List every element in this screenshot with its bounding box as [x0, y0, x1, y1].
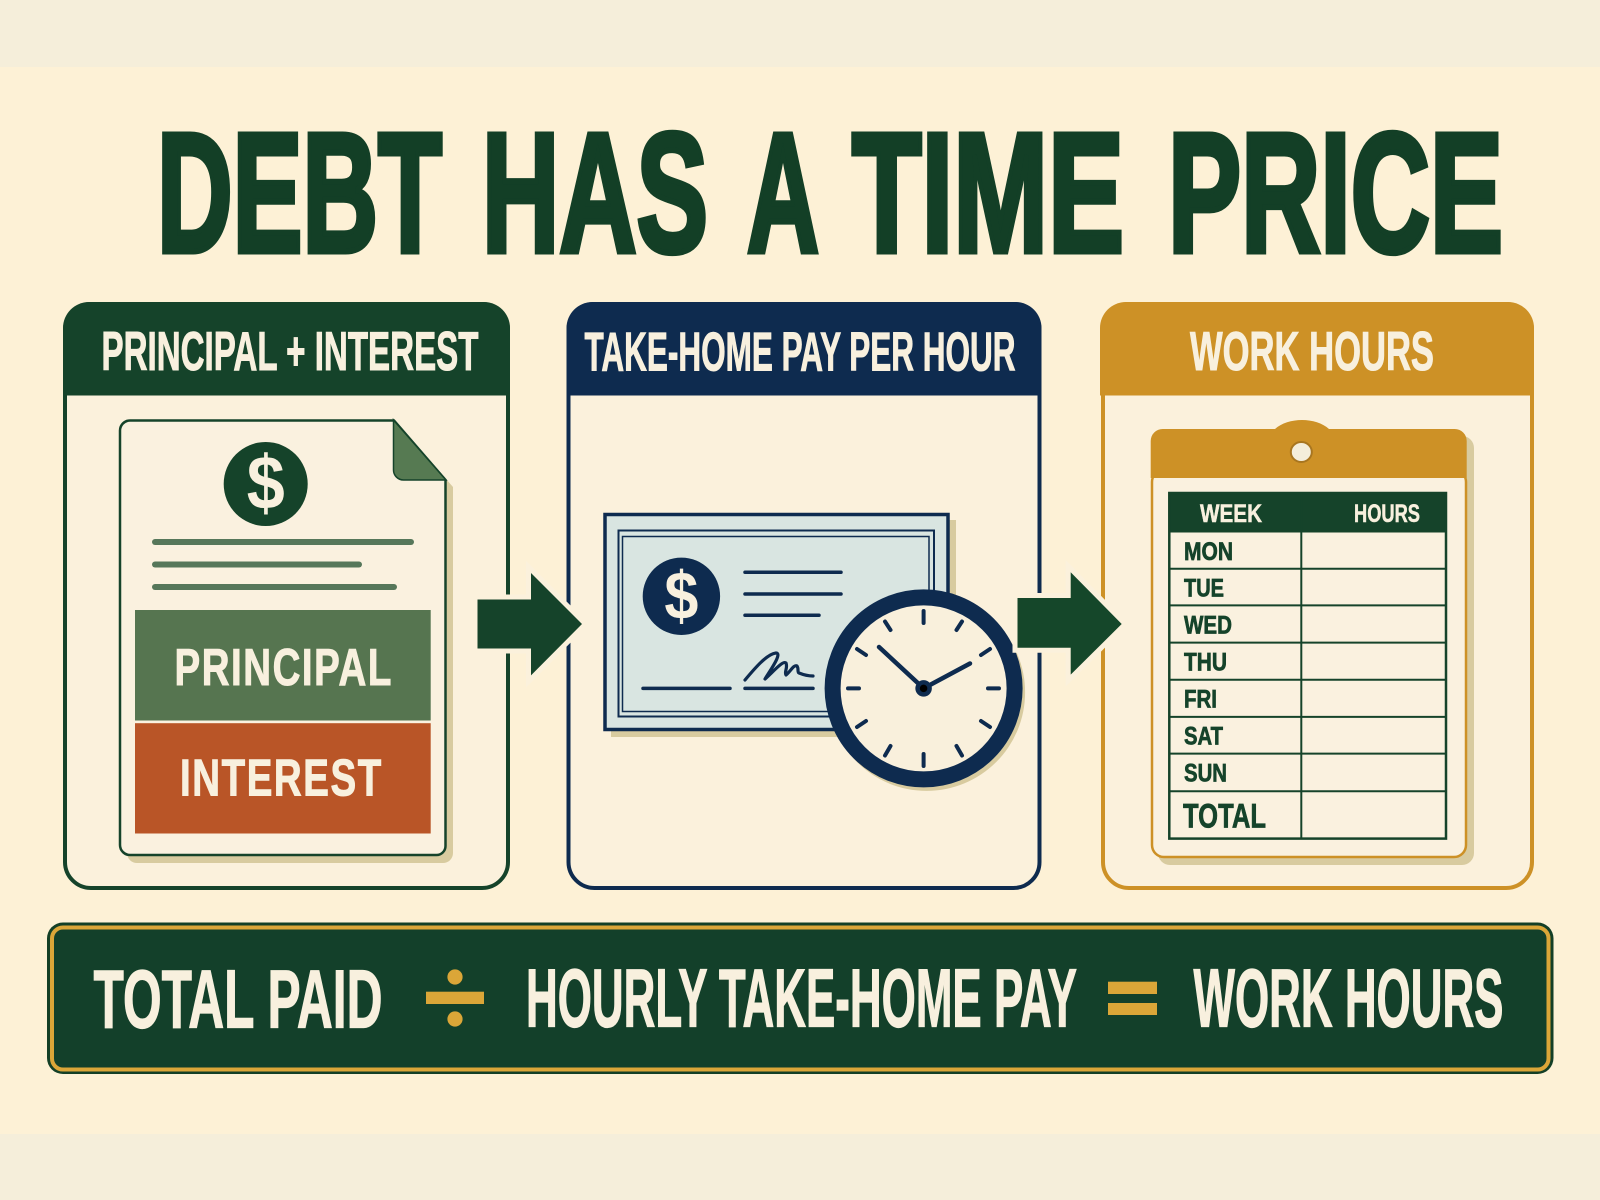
- clock ticks: [848, 611, 999, 766]
- table day labels: FRI: [1184, 685, 1217, 713]
- table header labels: HOURS: [1354, 500, 1420, 528]
- panel 3 heading: WORK HOURS: [1190, 320, 1434, 382]
- icon: paycheck: [605, 514, 956, 737]
- document corner fold: [394, 420, 446, 480]
- table day labels: SAT: [1184, 722, 1223, 750]
- panel 3 header band: [1100, 302, 1534, 396]
- table day labels: TUE: [1184, 575, 1224, 603]
- table day labels: SUN: [1184, 759, 1227, 787]
- table header labels: WEEK: [1200, 500, 1262, 528]
- icon: check dollar badge: [643, 558, 720, 635]
- table header labels: [1200, 500, 1420, 528]
- timesheet table: [1169, 493, 1446, 839]
- panel 2 header band: [566, 302, 1042, 396]
- arrow: principal to pay: [478, 573, 582, 675]
- icon: check dollar badge: $: [664, 558, 698, 634]
- panel: principal + interest: [63, 302, 510, 888]
- icon: dollar badge: [224, 441, 308, 526]
- formula bar: [47, 922, 1554, 1074]
- title: [157, 98, 1503, 288]
- check text lines: [643, 572, 841, 688]
- table day labels: MON: [1184, 538, 1233, 566]
- title: DEBT: [157, 98, 442, 288]
- principal block: [135, 610, 431, 720]
- icon: clipboard timesheet: [1151, 420, 1474, 865]
- divide symbol: [426, 969, 484, 1027]
- interest block: INTEREST: [180, 749, 381, 807]
- document text lines: [155, 542, 411, 587]
- principal block: PRINCIPAL: [174, 638, 391, 696]
- title: TIME: [852, 98, 1124, 288]
- icon: statement document: [120, 420, 453, 863]
- panel 1 heading: PRINCIPAL + INTEREST: [102, 320, 478, 382]
- title: A: [747, 98, 819, 288]
- arrow: pay to hours: [1018, 572, 1122, 675]
- table day labels: TOTAL: [1183, 798, 1266, 836]
- table day labels: WED: [1184, 612, 1232, 640]
- panel 1 frame: [65, 304, 508, 888]
- panel 2 heading: TAKE-HOME PAY PER HOUR: [584, 320, 1016, 382]
- title: HAS: [482, 98, 708, 288]
- icon: clock: [828, 594, 1025, 791]
- equals symbol: [1108, 982, 1157, 1015]
- table day labels: [1183, 538, 1266, 836]
- table day labels: THU: [1184, 649, 1227, 677]
- panel: take-home pay per hour: [566, 302, 1042, 888]
- panel 2 frame: [568, 304, 1040, 888]
- icon: dollar badge: $: [247, 441, 285, 526]
- panel 1 header band: [63, 302, 510, 396]
- formula term: total paid: TOTAL PAID: [94, 952, 382, 1046]
- panel 3 frame: [1103, 304, 1532, 888]
- interest block: [135, 723, 431, 834]
- clipboard hole: [1291, 442, 1312, 462]
- clock hands: [879, 647, 970, 694]
- clipboard clip: [1151, 420, 1467, 478]
- signature: [745, 653, 813, 680]
- formula term: hourly take-home pay: HOURLY TAKE-HOME PAY: [526, 952, 1077, 1044]
- panel: work hours: [1100, 302, 1534, 888]
